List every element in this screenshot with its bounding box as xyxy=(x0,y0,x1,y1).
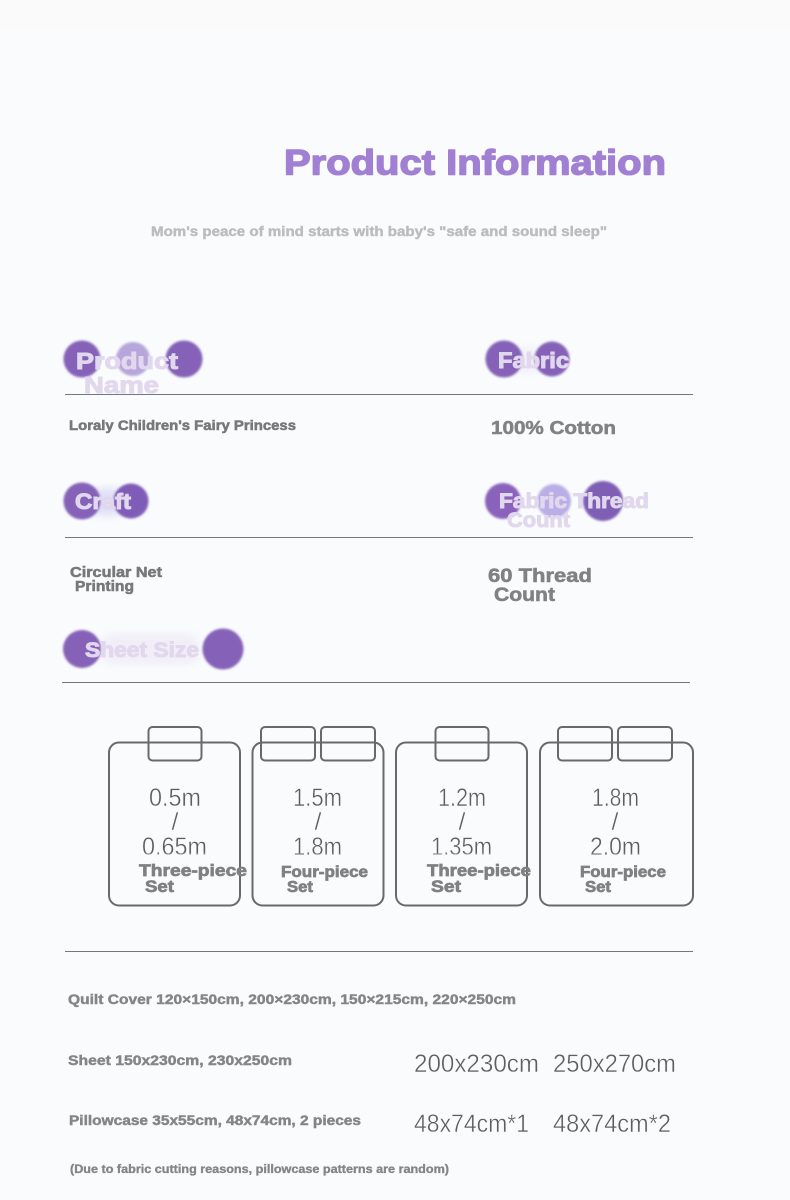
section: fabric xyxy=(486,340,616,438)
row: pillowcase: 48x74cm*1 xyxy=(414,1110,529,1138)
craft value xyxy=(70,565,162,595)
fabric value: 100% Cotton xyxy=(491,417,616,438)
heading badge: sheet size: Sheet Size xyxy=(85,639,199,662)
title: Product Information xyxy=(284,144,666,182)
heading badge: fabric: Fabric xyxy=(498,348,569,373)
bed: 1.8m / 2.0m four-piece: Set xyxy=(585,879,611,896)
section divider 4 xyxy=(65,950,693,952)
row: pillowcase: Pillowcase 35x55cm, 48x74cm, 2 pieces xyxy=(69,1113,361,1128)
row: sheet: Sheet 150x230cm, 230x250cm xyxy=(68,1053,292,1068)
size table xyxy=(68,992,676,1176)
bed: 1.5m / 1.8m four-piece: 1.5m xyxy=(293,784,342,812)
heading badge: craft: Craft xyxy=(75,489,132,514)
bed: 1.2m / 1.35m three-piece: / xyxy=(459,808,466,836)
row: sheet: 200x230cm xyxy=(414,1050,539,1078)
bed: 0.5m / 0.65m three-piece: 0.5m xyxy=(149,784,201,812)
bed: 1.8m / 2.0m four-piece: 1.8m xyxy=(592,784,639,812)
craft value: Circular Net xyxy=(70,565,162,581)
bed: 1.5m / 1.8m four-piece: Four-piece xyxy=(281,864,368,881)
section: thread count xyxy=(485,481,649,606)
section divider 2 xyxy=(65,536,693,538)
row: sheet: 250x270cm xyxy=(553,1050,676,1078)
heading badge: sheet size xyxy=(63,628,244,670)
bed size diagrams xyxy=(109,727,693,906)
footnote: (Due to fabric cutting reasons, pillowcase patterns are random) xyxy=(70,1164,449,1176)
row: quilt cover: Quilt Cover 120×150cm, 200×230cm, 150×215cm, 220×250cm xyxy=(68,992,516,1007)
heading badge: product name: Product xyxy=(76,348,178,374)
product name value: Loraly Children's Fairy Princess xyxy=(69,417,296,433)
bed: 1.5m / 1.8m four-piece xyxy=(252,727,384,906)
bed: 0.5m / 0.65m three-piece: Three-piece xyxy=(139,861,247,880)
bed: 1.5m / 1.8m four-piece: / xyxy=(315,808,322,836)
bed: 1.2m / 1.35m three-piece: 1.35m xyxy=(431,833,492,861)
heading badge: product name: Name xyxy=(84,372,159,398)
bed: 0.5m / 0.65m three-piece: Set xyxy=(145,877,174,896)
section: product name xyxy=(64,340,296,433)
bed: 0.5m / 0.65m three-piece: 0.65m xyxy=(142,833,207,861)
heading badge: fabric thread count: Count xyxy=(507,509,570,532)
thread count value xyxy=(488,566,592,606)
bed: 1.8m / 2.0m four-piece: Four-piece xyxy=(580,864,666,881)
thread count value: 60 Thread xyxy=(488,566,592,587)
bed: 1.2m / 1.35m three-piece: 1.2m xyxy=(438,784,486,812)
section divider 3 xyxy=(62,682,690,684)
bed: 1.2m / 1.35m three-piece: Three-piece xyxy=(427,861,531,880)
heading badge: product name xyxy=(64,340,202,398)
row: sheet xyxy=(68,1050,676,1078)
bed: 1.8m / 2.0m four-piece: 2.0m xyxy=(590,833,641,861)
bed: 0.5m / 0.65m three-piece: / xyxy=(172,808,179,836)
section: craft xyxy=(64,482,162,595)
bed: 1.5m / 1.8m four-piece: Set xyxy=(287,879,313,896)
row: pillowcase: 48x74cm*2 xyxy=(553,1110,671,1138)
heading badge: fabric thread count xyxy=(485,481,649,532)
bed: 1.8m / 2.0m four-piece: / xyxy=(612,808,619,836)
bed: 1.2m / 1.35m three-piece xyxy=(396,727,531,906)
heading badge: fabric thread count: Fabric Thread xyxy=(499,490,649,513)
thread count value: Count xyxy=(494,585,556,606)
section divider 1 xyxy=(65,394,693,396)
craft value: Printing xyxy=(75,579,134,595)
bed: 1.8m / 2.0m four-piece xyxy=(540,727,693,906)
row: pillowcase xyxy=(69,1110,671,1138)
bed: 1.2m / 1.35m three-piece: Set xyxy=(431,877,461,896)
bed: 1.5m / 1.8m four-piece: 1.8m xyxy=(293,833,342,861)
subtitle: Mom's peace of mind starts with baby's "safe and sound sleep" xyxy=(151,223,607,239)
bed: 0.5m / 0.65m three-piece xyxy=(109,727,247,906)
